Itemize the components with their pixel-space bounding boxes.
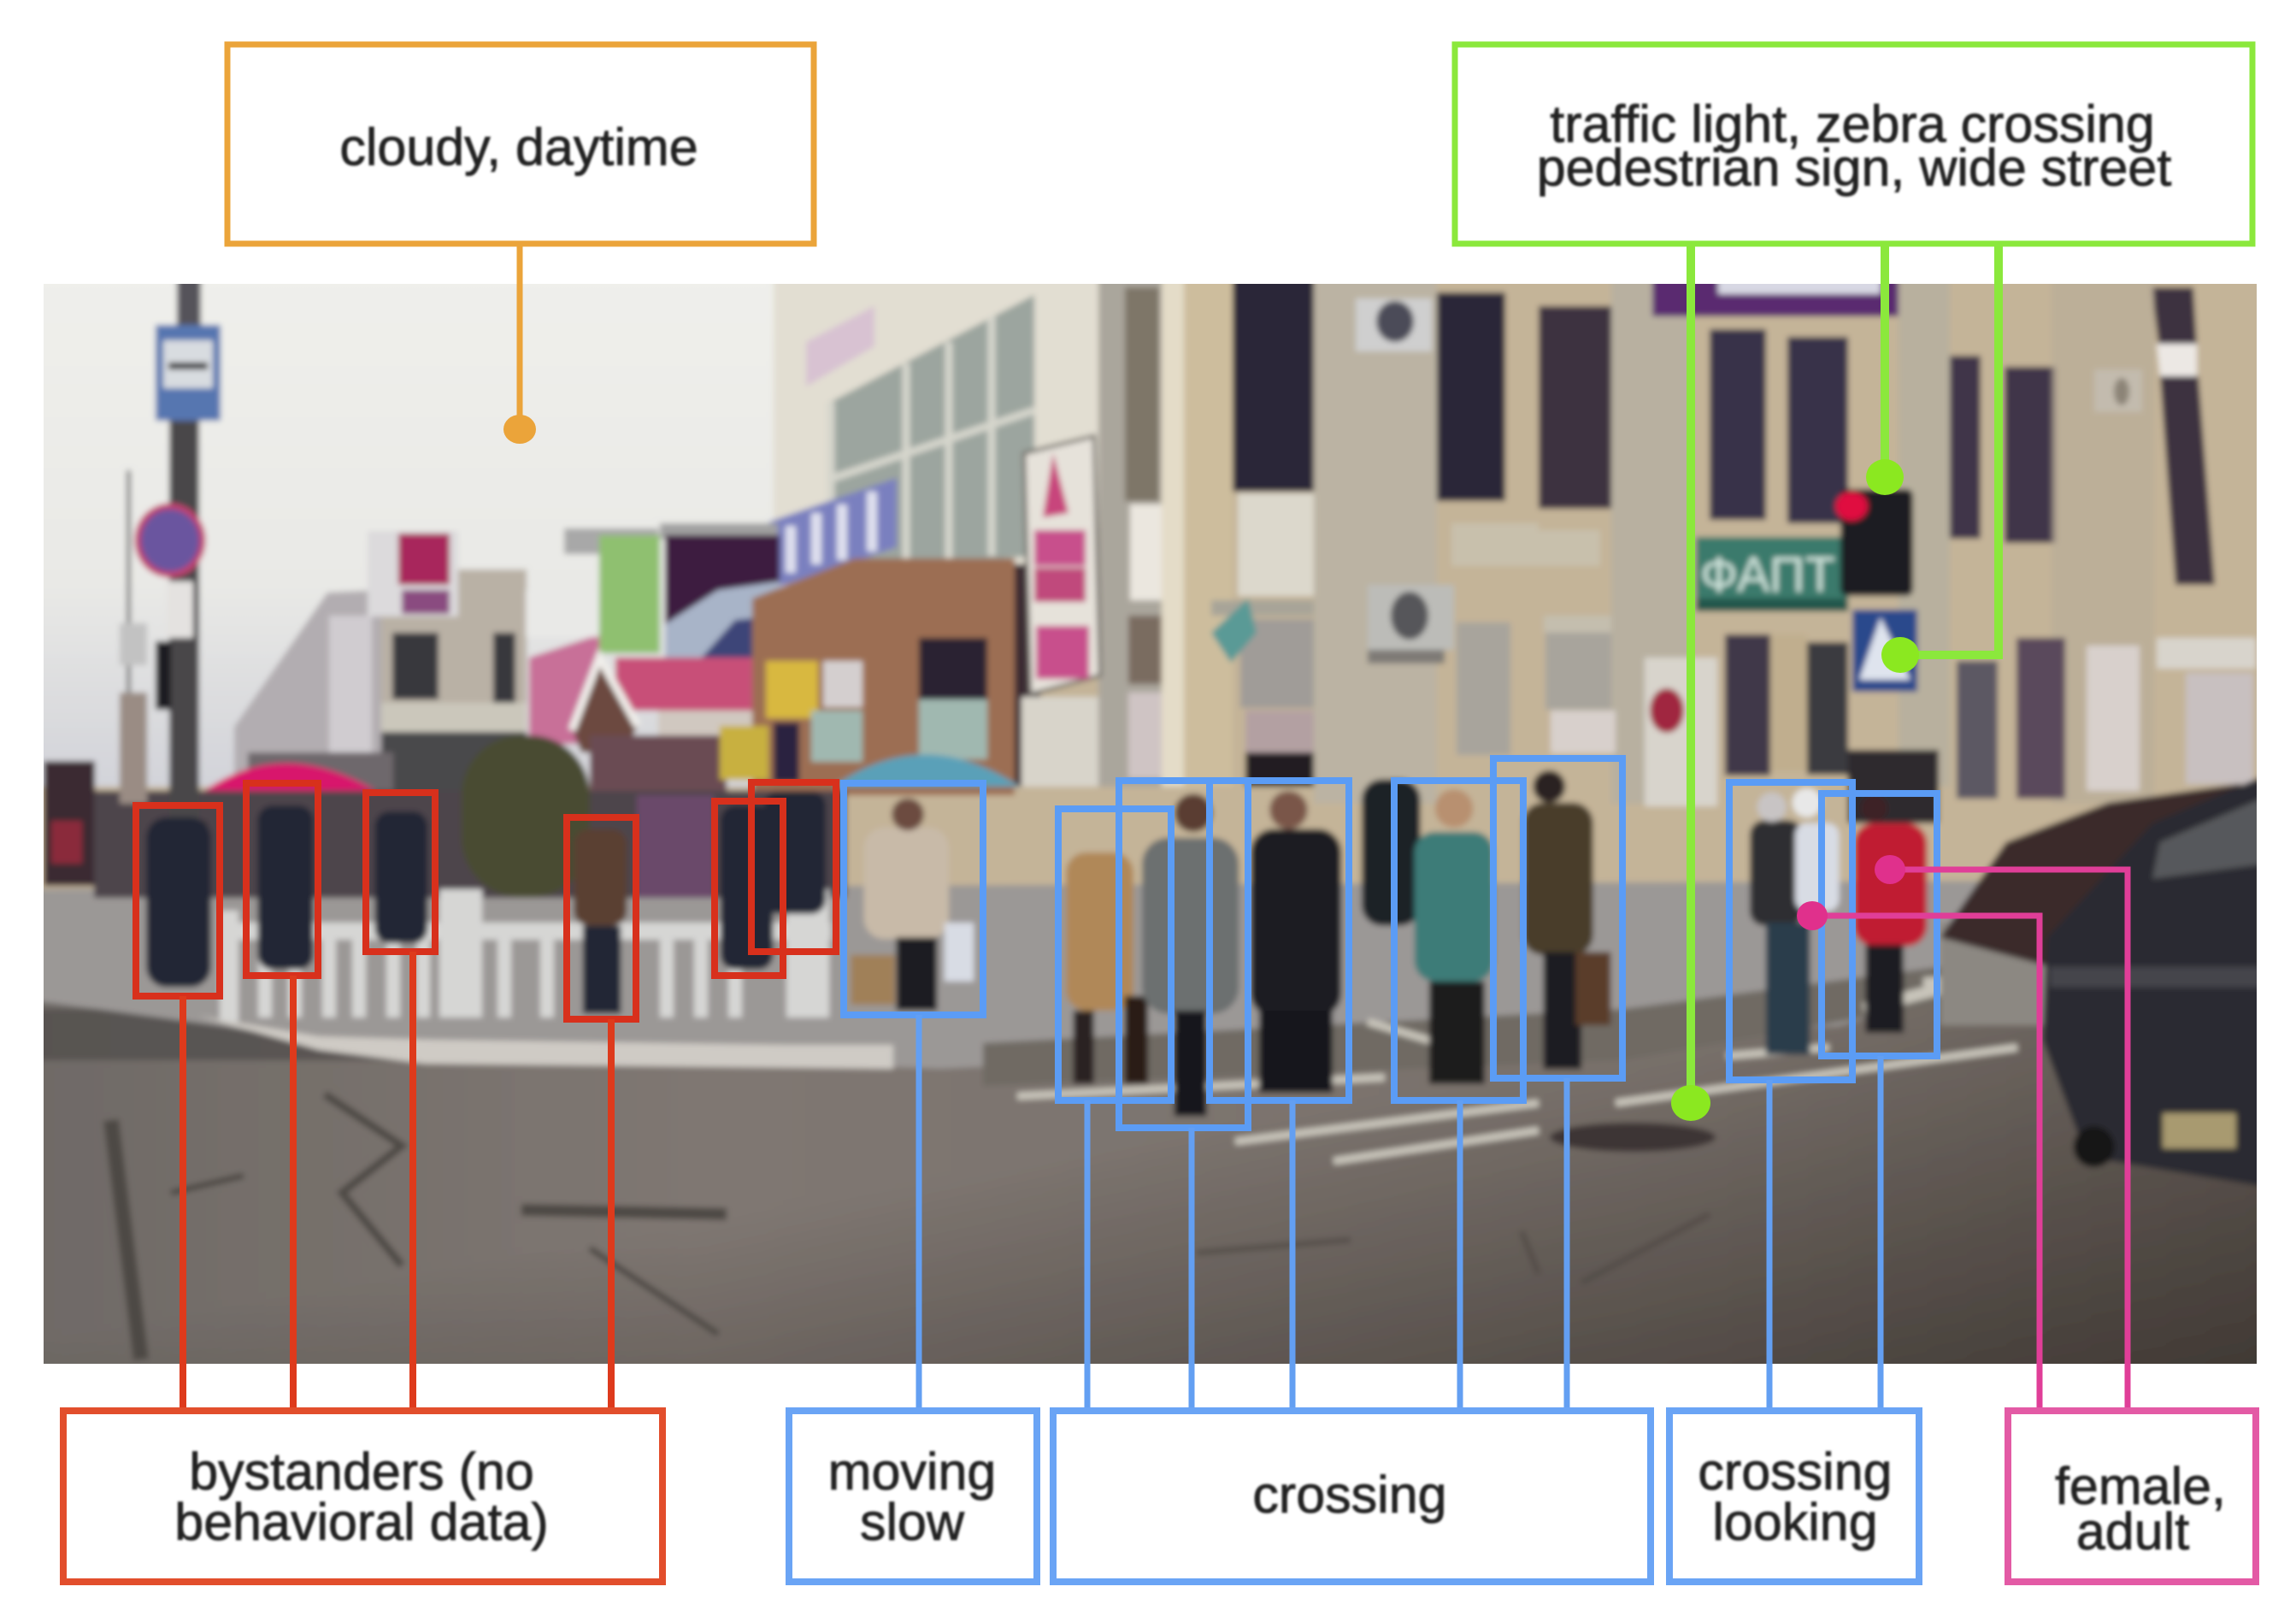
callout: demographics: female,: [2055, 1457, 2226, 1515]
pole with signs: [120, 274, 221, 898]
callout: scene elements: [1455, 44, 2252, 1121]
bystanders figures: [146, 791, 826, 1013]
pedestrian boxes: bystanders: [136, 782, 836, 1019]
parked cars: [1940, 776, 2270, 1187]
callout: scene elements: pedestrian sign, wide street: [1537, 139, 2171, 197]
pedestrian crossing sign: [1852, 610, 1917, 692]
connectors: bystanders: [183, 952, 611, 1411]
pharmacy sign: [1696, 537, 1848, 611]
crossing and looking pedestrians: [1750, 750, 1939, 1054]
pharmacy sign: ФАПТ: [1700, 547, 1835, 603]
sidewalk: [34, 881, 2052, 1069]
callout: demographics: adult: [2076, 1502, 2189, 1560]
road cracks: [111, 1094, 1710, 1359]
central facade: pillars, windows: [1125, 274, 1693, 804]
connectors: scene elements: [1691, 244, 1999, 1103]
callout: bystanders: [63, 952, 662, 1582]
callout: crossing looking: looking: [1712, 1493, 1878, 1551]
distant bus: [44, 761, 95, 886]
sky: [34, 274, 786, 787]
photo: street scene: [34, 274, 2270, 1377]
callout: crossing looking: [1669, 1056, 1919, 1582]
callout: moving slow: slow: [860, 1493, 965, 1551]
callout: scene elements: traffic light, zebra crossing: [1550, 95, 2155, 153]
callout: bystanders: behavioral data): [174, 1493, 549, 1551]
crosswalk markings: [1017, 966, 2026, 1161]
callout: crossing looking: crossing: [1698, 1442, 1893, 1501]
banner with pink blocks: [1021, 274, 1167, 787]
curb: [198, 1016, 893, 1069]
dark crowd and shops behind the fence: [94, 735, 846, 898]
far street buildings: [234, 531, 527, 800]
crossing pedestrians: [1066, 770, 1610, 1116]
red roof shop: [572, 658, 761, 795]
right facade with windows: [1551, 274, 2256, 806]
traffic light: [1835, 489, 1913, 596]
callout: demographics: [1797, 855, 2256, 1582]
brown building: [720, 558, 1040, 795]
manhole: [1550, 1123, 1716, 1152]
road: [34, 983, 2265, 1377]
callout: moving slow: moving: [828, 1442, 996, 1501]
connector: weather: [516, 244, 523, 428]
umbrellas: [204, 754, 1020, 791]
air conditioners: [1356, 298, 2142, 664]
pedestrian boxes: behavior: [844, 758, 1937, 1128]
connectors: crossing: [1087, 1078, 1567, 1411]
connectors: demographics: [1812, 870, 2128, 1411]
white building with glass facade: [769, 274, 1103, 590]
callout: weather: cloudy, daytime: [339, 118, 698, 176]
callout: crossing: [1053, 1078, 1651, 1582]
callout: bystanders: bystanders (no: [189, 1442, 534, 1501]
green sign and billboard: [526, 523, 780, 744]
callout: moving slow: [789, 1015, 1037, 1582]
callout: weather: [227, 44, 814, 444]
pedestrian: moving slow: [851, 799, 974, 1011]
fence: [220, 889, 831, 1022]
callout: crossing: crossing: [1252, 1466, 1447, 1524]
